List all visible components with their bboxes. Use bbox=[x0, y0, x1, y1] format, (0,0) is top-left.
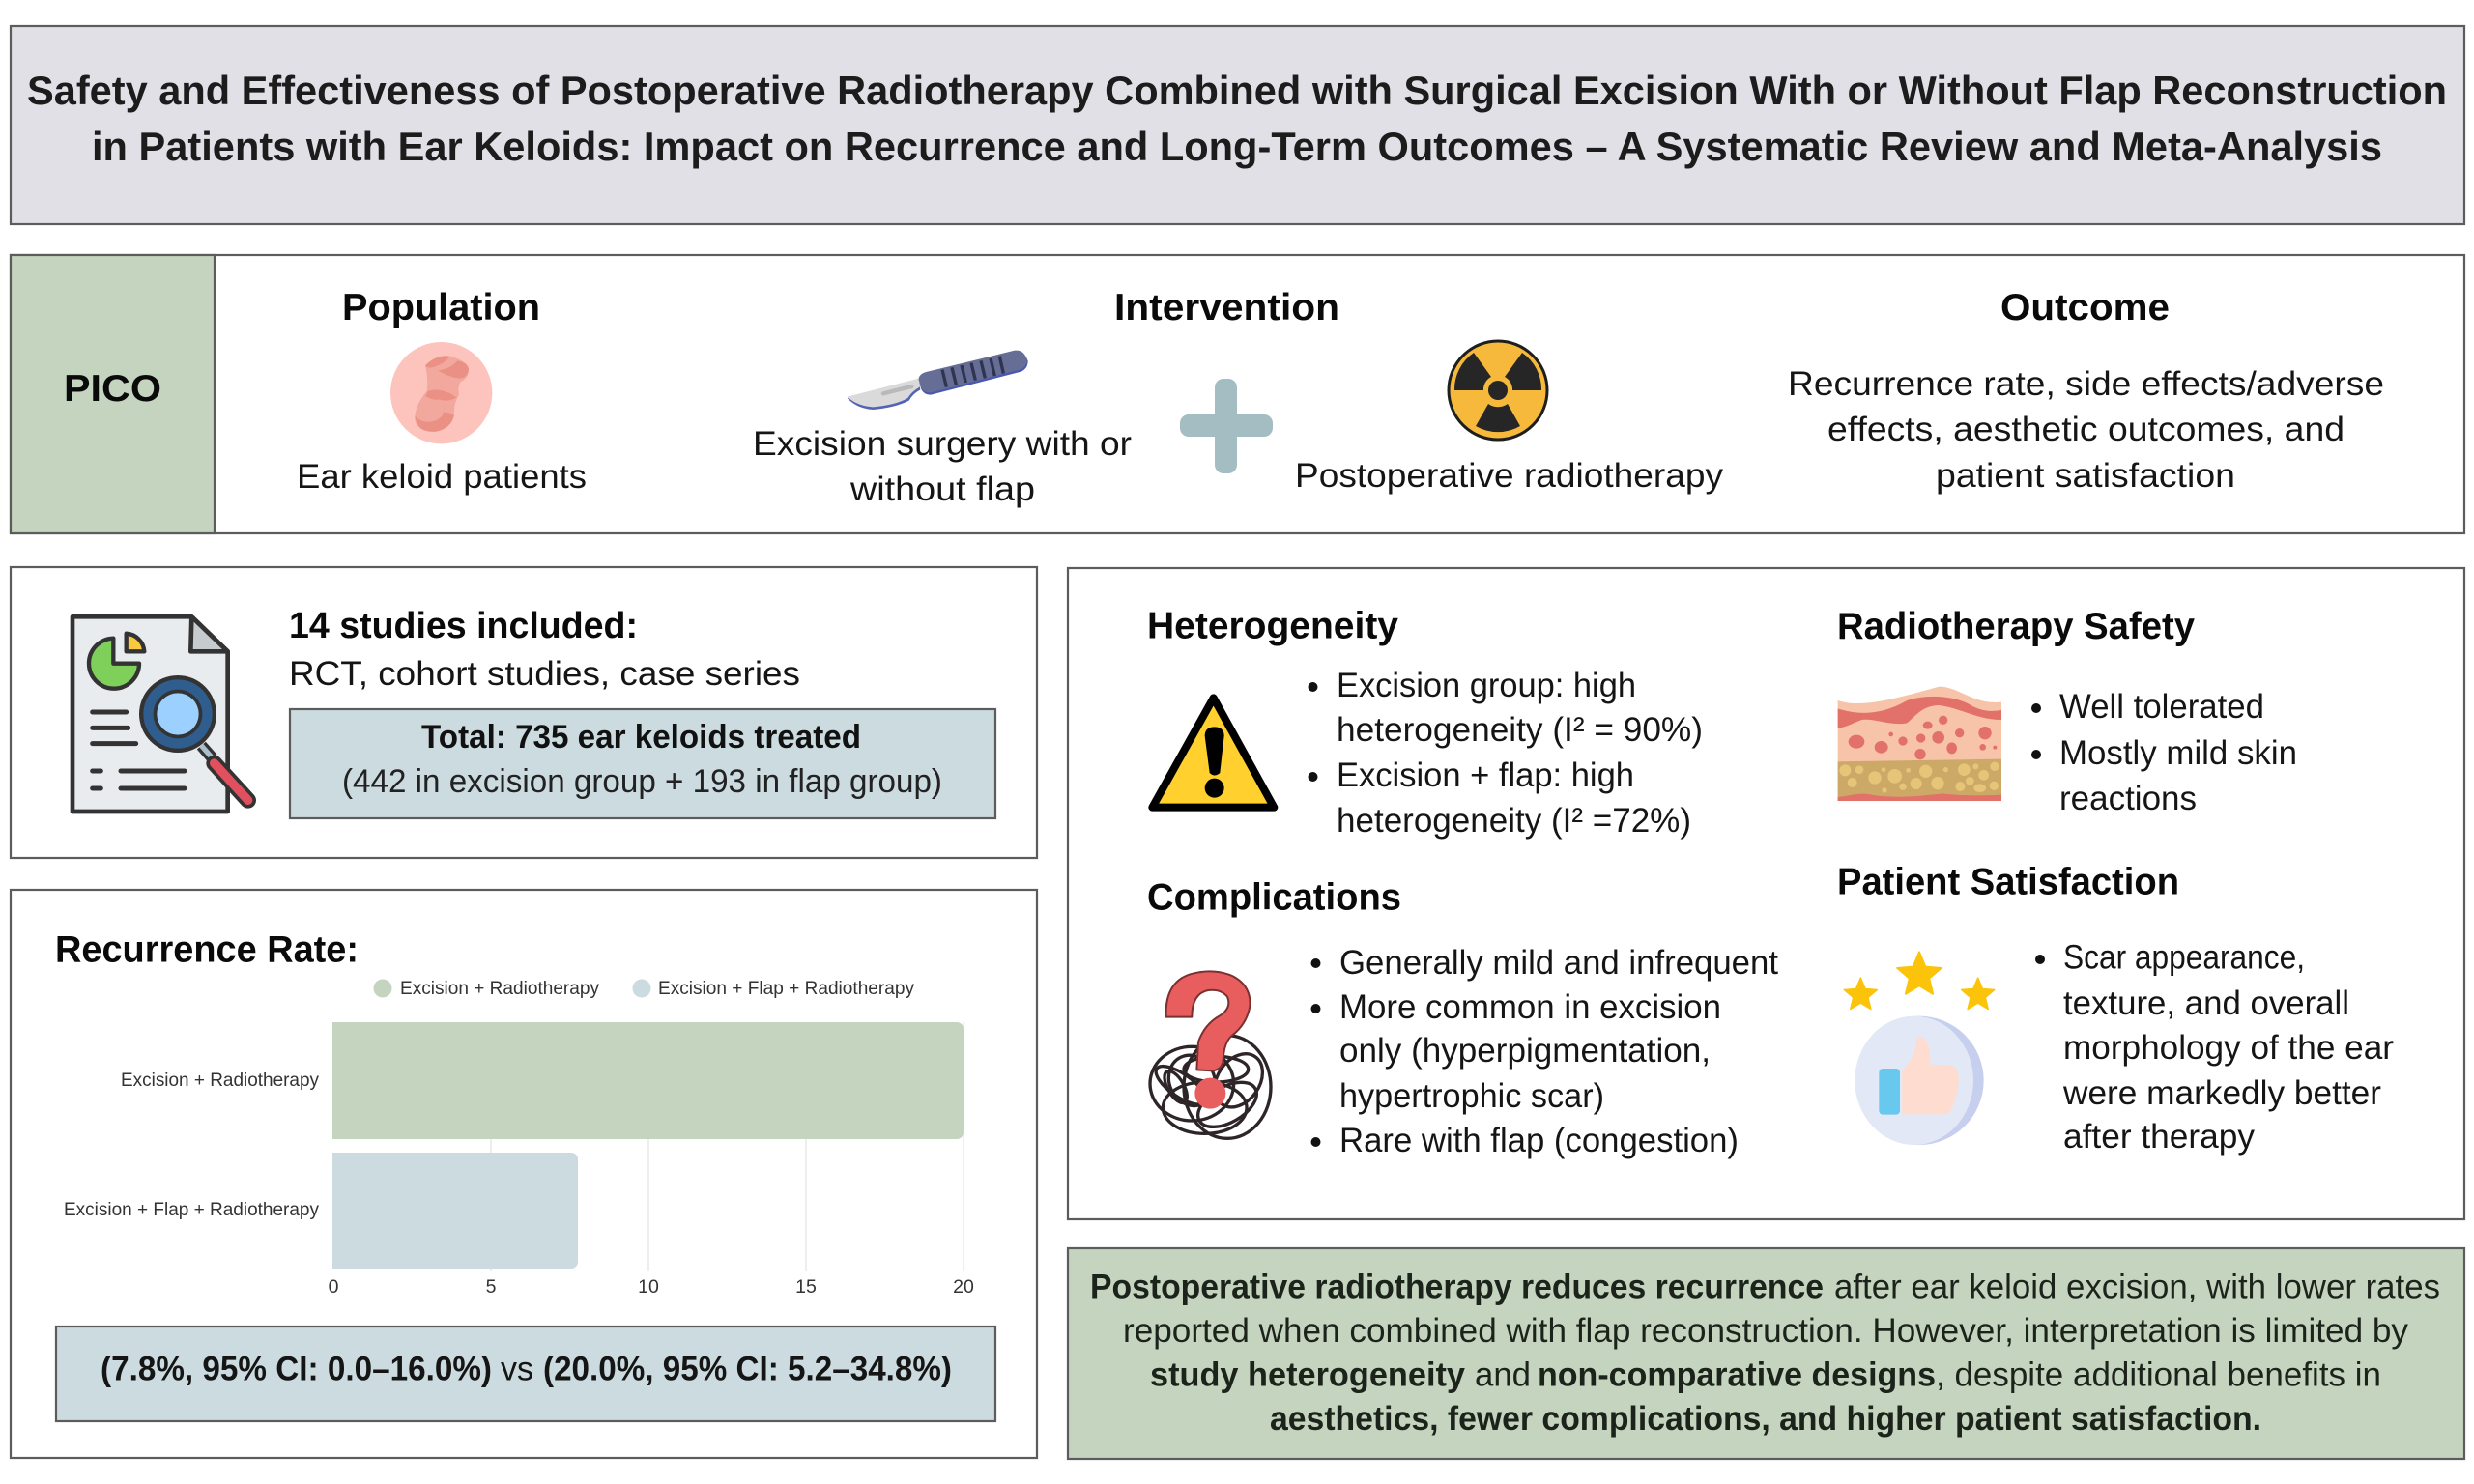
stat callout: (20.0%, 95% CI: 5.2–34.8%) bbox=[543, 1351, 952, 1387]
patient satisfaction bullets: texture, and overall bbox=[2063, 984, 2349, 1022]
icon: stars and thumbs up bbox=[1844, 952, 1995, 1145]
title: Safety and Effectiveness of Postoperative Radiotherapy Combined with Surgical Excision With or Without Flap Reconstruction bbox=[27, 68, 2447, 113]
patient satisfaction bullets: were markedly better bbox=[2062, 1073, 2381, 1112]
axis labels: Excision + Flap + Radiotherapy bbox=[64, 1199, 319, 1220]
heterogeneity bullets: Excision group: high bbox=[1337, 666, 1636, 704]
panel: findings bbox=[1068, 568, 2464, 1219]
recurrence heading: Recurrence Rate: bbox=[55, 929, 359, 970]
outcome text: Recurrence rate, side effects/adverse bbox=[1788, 364, 2384, 403]
title: in Patients with Ear Keloids: Impact on Recurrence and Long-Term Outcomes – A Systematic Review and Meta-Analysis bbox=[92, 124, 2382, 169]
total callout: (442 in excision group + 193 in flap group) bbox=[342, 763, 942, 800]
bar chart bbox=[64, 1022, 974, 1298]
studies heading: 14 studies included: bbox=[289, 606, 638, 646]
icon: radiation bbox=[1449, 341, 1547, 440]
legend bbox=[373, 978, 914, 999]
axis ticks: 20 bbox=[953, 1276, 974, 1298]
intervention heading: Intervention bbox=[1114, 287, 1339, 328]
outcome text bbox=[1788, 364, 2384, 495]
icon: ear keloid bbox=[390, 342, 492, 443]
conclusion: non-comparative designs bbox=[1538, 1356, 1936, 1393]
study designs: RCT, cohort studies, case series bbox=[289, 654, 800, 693]
outcome text: effects, aesthetic outcomes, and bbox=[1827, 410, 2345, 448]
PICO label: PICO bbox=[64, 368, 161, 410]
patient satisfaction heading: Patient Satisfaction bbox=[1837, 862, 2179, 902]
patient satisfaction bullets: Scar appearance, bbox=[2063, 937, 2305, 976]
axis labels bbox=[64, 1070, 319, 1220]
conclusion bbox=[1068, 1248, 2464, 1459]
radiotherapy safety bullets: reactions bbox=[2059, 779, 2197, 817]
heterogeneity bullets: Excision + flap: high bbox=[1337, 756, 1634, 794]
axis ticks bbox=[329, 1276, 974, 1298]
population text: Ear keloid patients bbox=[297, 457, 587, 496]
panel: PICO bbox=[11, 255, 2464, 533]
icon: warning bbox=[1152, 698, 1274, 808]
complications bullets: hypertrophic scar) bbox=[1339, 1076, 1604, 1115]
radiotherapy safety bullets: Mostly mild skin bbox=[2059, 733, 2297, 772]
icon: document with magnifier bbox=[72, 616, 248, 812]
patient satisfaction bullets bbox=[2035, 937, 2394, 1156]
heterogeneity bullets: heterogeneity (I² = 90%) bbox=[1337, 710, 1703, 749]
conclusion: and bbox=[1475, 1356, 1531, 1393]
title bbox=[11, 26, 2464, 224]
conclusion: Postoperative radiotherapy reduces recurrence bbox=[1090, 1268, 1824, 1306]
radiotherapy text: Postoperative radiotherapy bbox=[1295, 456, 1723, 495]
conclusion: aesthetics, fewer complications, and higher patient satisfaction. bbox=[1270, 1400, 2261, 1438]
bar: excision + flap + radiotherapy bbox=[332, 1153, 578, 1269]
icon: skin layers bbox=[1838, 687, 2001, 801]
conclusion: reported when combined with flap reconstruction. However, interpretation is limited by bbox=[1123, 1312, 2408, 1350]
radiotherapy safety heading: Radiotherapy Safety bbox=[1837, 606, 2195, 647]
heterogeneity bullets bbox=[1309, 666, 1703, 840]
icon: question mark tangle bbox=[1150, 971, 1273, 1138]
heterogeneity heading: Heterogeneity bbox=[1147, 605, 1398, 647]
stat callout bbox=[56, 1327, 995, 1421]
complications bullets: Rare with flap (congestion) bbox=[1339, 1121, 1739, 1159]
radiotherapy safety bullets bbox=[2031, 687, 2297, 817]
radiotherapy safety bullets: Well tolerated bbox=[2059, 687, 2264, 726]
conclusion: , despite additional benefits in bbox=[1936, 1356, 2381, 1393]
complications bullets bbox=[1310, 943, 1778, 1159]
conclusion: after ear keloid excision, with lower rates bbox=[1834, 1268, 2440, 1306]
patient satisfaction bullets: after therapy bbox=[2063, 1117, 2255, 1156]
axis ticks: 10 bbox=[638, 1276, 659, 1298]
legend: Excision + Flap + Radiotherapy bbox=[658, 978, 914, 999]
excision text bbox=[753, 424, 1132, 508]
bar: excision + radiotherapy bbox=[332, 1022, 964, 1139]
conclusion: study heterogeneity bbox=[1150, 1356, 1466, 1393]
complications heading: Complications bbox=[1147, 877, 1401, 918]
outcome heading: Outcome bbox=[2000, 287, 2170, 328]
complications bullets: More common in excision bbox=[1339, 987, 1721, 1026]
heterogeneity bullets: heterogeneity (I² =72%) bbox=[1337, 801, 1691, 840]
complications bullets: Generally mild and infrequent bbox=[1339, 943, 1778, 982]
total callout: Total: 735 ear keloids treated bbox=[421, 719, 861, 756]
excision text: without flap bbox=[849, 470, 1035, 508]
axis ticks: 0 bbox=[329, 1276, 339, 1298]
outcome text: patient satisfaction bbox=[1936, 456, 2235, 495]
panel: studies bbox=[11, 567, 1037, 858]
icon: scalpel bbox=[848, 351, 1028, 410]
axis labels: Excision + Radiotherapy bbox=[121, 1070, 319, 1091]
complications bullets: only (hyperpigmentation, bbox=[1339, 1031, 1711, 1070]
axis ticks: 5 bbox=[486, 1276, 497, 1298]
legend: Excision + Radiotherapy bbox=[400, 978, 599, 999]
total callout bbox=[290, 709, 995, 818]
panel: recurrence rate bbox=[11, 890, 1037, 1458]
stat callout: vs bbox=[501, 1351, 533, 1387]
PICO label bbox=[11, 255, 215, 533]
patient satisfaction bullets: morphology of the ear bbox=[2063, 1028, 2394, 1067]
excision text: Excision surgery with or bbox=[753, 424, 1132, 463]
axis ticks: 15 bbox=[795, 1276, 817, 1298]
population heading: Population bbox=[342, 287, 540, 328]
stat callout: (7.8%, 95% CI: 0.0–16.0%) bbox=[101, 1351, 492, 1387]
icon: plus bbox=[1180, 379, 1273, 473]
